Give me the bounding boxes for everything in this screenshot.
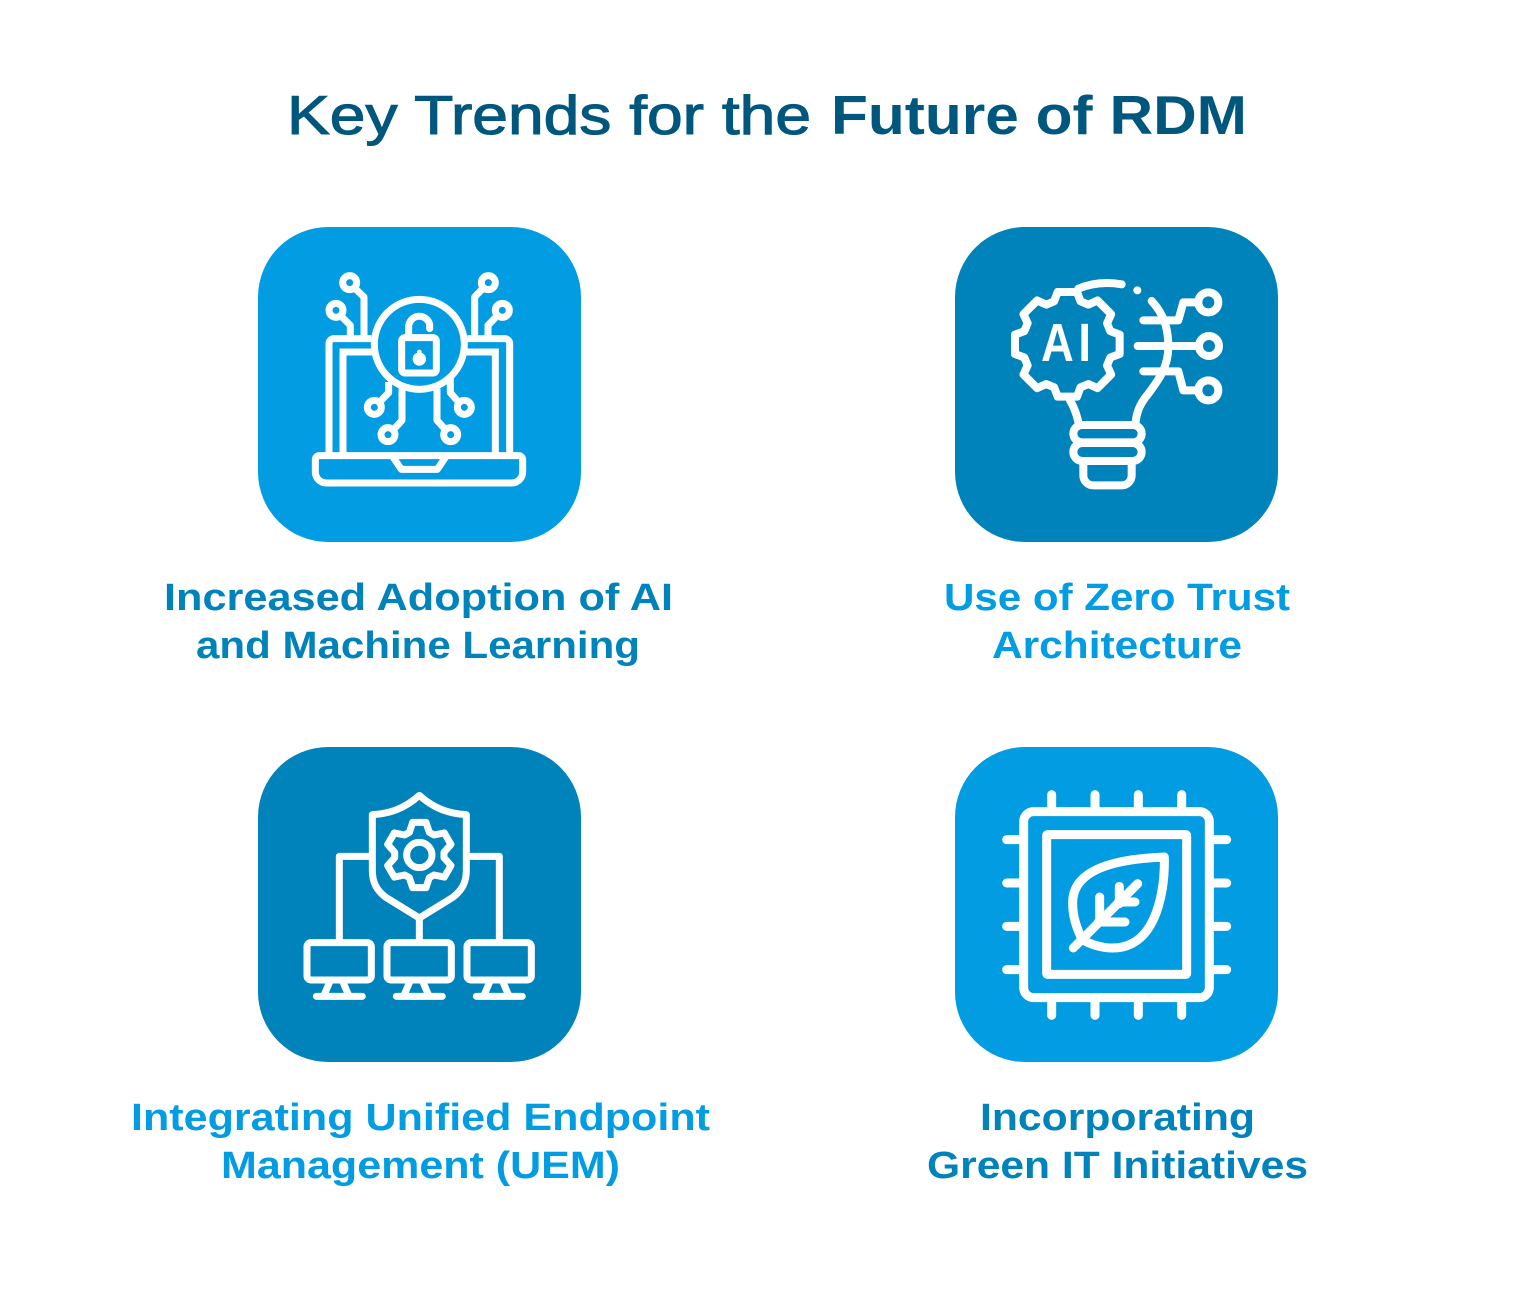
icon: light bulb with AI gear and circuits <box>1015 283 1219 485</box>
label: Architecture <box>992 625 1242 667</box>
icon: light bulb with AI gear and circuits: AI <box>1041 314 1091 373</box>
label: Management (UEM) <box>221 1145 620 1187</box>
label: Green IT Initiatives <box>927 1145 1308 1187</box>
icon tile: dark blue <box>955 227 1278 542</box>
label <box>927 1097 1308 1187</box>
label <box>944 577 1290 667</box>
panel: AI and machine learning <box>164 227 673 667</box>
icon tile: bright blue <box>955 747 1278 1062</box>
icon: microchip with leaf <box>1007 795 1227 1015</box>
label: Use of Zero Trust <box>944 577 1290 619</box>
icon: shield with gear and three monitors <box>307 795 531 996</box>
panel: green IT initiatives <box>927 747 1308 1187</box>
icon tile: bright blue <box>258 227 581 542</box>
icon: laptop with padlock and circuits <box>315 276 523 483</box>
panel: unified endpoint management <box>131 747 710 1187</box>
title <box>287 84 1247 146</box>
panel: zero trust architecture <box>944 227 1290 667</box>
label: Incorporating <box>980 1097 1255 1139</box>
title: Future of RDM <box>831 84 1247 146</box>
label: Increased Adoption of AI <box>164 577 673 619</box>
icon tile: dark blue <box>258 747 581 1062</box>
label: Integrating Unified Endpoint <box>131 1097 710 1139</box>
label <box>131 1097 710 1187</box>
label: and Machine Learning <box>196 625 640 667</box>
title: Key Trends for the <box>287 84 811 146</box>
label <box>164 577 673 667</box>
